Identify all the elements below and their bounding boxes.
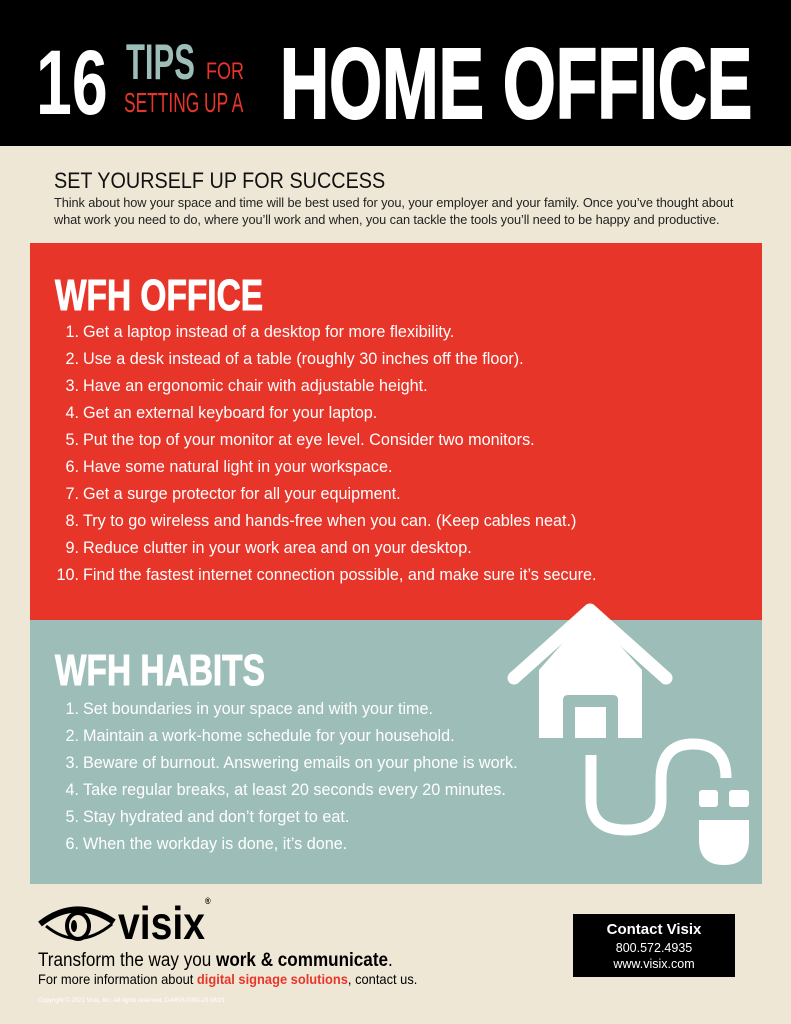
header [0, 0, 791, 146]
list: office tips: 9. [65, 539, 79, 557]
heading: WFH HABITS: WFH HABITS [55, 646, 265, 695]
list: office tips: 7. [65, 485, 79, 503]
list: office tips [56, 323, 596, 584]
contact box: 800.572.4935 [616, 941, 692, 955]
copyright: Copyright © 2021 Visix, Inc. All rights reserved. D-MKR-0000-23 06/21 [38, 998, 225, 1004]
list: office tips: Get a laptop instead of a desktop for more flexibility. [83, 323, 454, 341]
list: office tips: Get an external keyboard for your laptop. [83, 404, 377, 422]
list: habit tips: 5. [65, 808, 79, 826]
list: habit tips: Maintain a work-home schedule for your household. [83, 727, 455, 745]
tagline: Transform the way you work & communicate. [38, 950, 393, 971]
logo: visix [38, 896, 211, 949]
panel: WFH habits [30, 620, 762, 884]
intro heading: SET YOURSELF UP FOR SUCCESS [54, 168, 385, 193]
list: habit tips: Set boundaries in your space and with your time. [83, 700, 433, 718]
list: office tips: Have some natural light in your workspace. [83, 458, 393, 476]
list: office tips: 8. [65, 512, 79, 530]
list: office tips: 5. [65, 431, 79, 449]
list: habit tips: When the workday is done, it’s done. [83, 835, 347, 853]
list: habit tips: 1. [65, 700, 79, 718]
icon: house with mouse [508, 604, 749, 865]
list: habit tips: Take regular breaks, at least 20 seconds every 20 minutes. [83, 781, 506, 799]
contact box: www.visix.com [613, 957, 695, 971]
list: office tips: Have an ergonomic chair with adjustable height. [83, 377, 428, 395]
contact box [573, 914, 735, 977]
list: habit tips: 2. [65, 727, 79, 745]
list: office tips: Get a surge protector for all your equipment. [83, 485, 401, 503]
list: office tips: 4. [65, 404, 79, 422]
list: habit tips [65, 700, 518, 853]
list: office tips: 3. [65, 377, 79, 395]
heading: WFH OFFICE: WFH OFFICE [55, 271, 263, 320]
list: office tips: 1. [65, 323, 79, 341]
panel: WFH office [30, 243, 762, 620]
contact box: Contact Visix [607, 921, 701, 938]
list: office tips: Find the fastest internet connection possible, and make sure it’s secure. [83, 566, 596, 584]
list: office tips: Try to go wireless and hands-free when you can. (Keep cables neat.) [83, 512, 576, 530]
title SETTING UP A: SETTING UP A [124, 87, 243, 118]
list: office tips: 6. [65, 458, 79, 476]
title TIPS: TIPS [126, 34, 195, 90]
title FOR: FOR [206, 58, 244, 85]
list: habit tips: 3. [65, 754, 79, 772]
list: habit tips: 6. [65, 835, 79, 853]
intro text: Think about how your space and time will be best used for you, your employer and your family. Once you’ve thought about what work you need to do, where you’ll work and when, you can tackle the tools you’ll need to be happy and productive. [54, 195, 733, 227]
list: habit tips: Beware of burnout. Answering emails on your phone is work. [83, 754, 518, 772]
list: office tips: 2. [65, 350, 79, 368]
list: office tips: 10. [56, 566, 79, 584]
list: office tips: Use a desk instead of a table (roughly 30 inches off the floor). [83, 350, 524, 368]
title HOME OFFICE: HOME OFFICE [280, 28, 752, 140]
info line: For more information about digital signage solutions, contact us. [38, 971, 417, 987]
list: habit tips: Stay hydrated and don’t forget to eat. [83, 808, 349, 826]
list: office tips: Reduce clutter in your work area and on your desktop. [83, 539, 472, 557]
title number: 16 [36, 32, 108, 134]
list: habit tips: 4. [65, 781, 79, 799]
logo: visix: visix® [118, 896, 211, 949]
list: office tips: Put the top of your monitor at eye level. Consider two monitors. [83, 431, 535, 449]
